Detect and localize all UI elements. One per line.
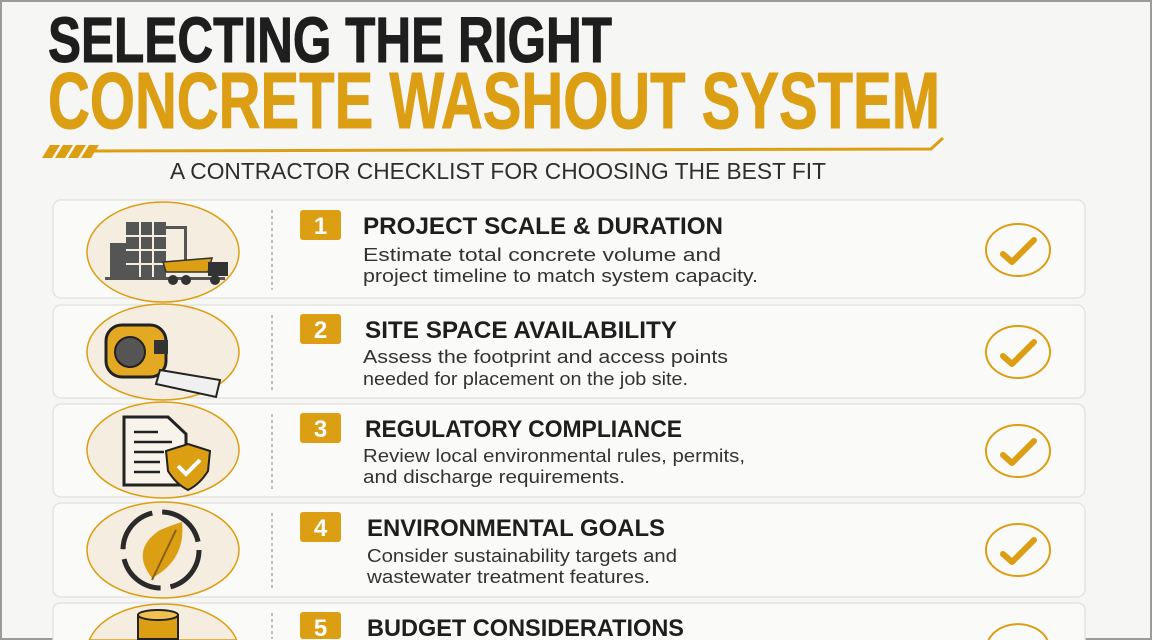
icon: checkmark — [986, 224, 1050, 276]
description: Consider sustainability targets and — [367, 546, 677, 566]
description — [363, 245, 758, 286]
description — [363, 347, 728, 389]
row 2: site space — [53, 304, 1085, 400]
number badge 4 — [300, 512, 341, 542]
number badge 3: 3 — [314, 416, 327, 443]
title — [48, 4, 940, 145]
title: SELECTING THE RIGHT — [48, 4, 612, 76]
description — [363, 446, 745, 487]
icon: coins — [89, 604, 237, 640]
row 4: environmental — [53, 502, 1085, 598]
row 3: regulatory — [53, 402, 1085, 498]
icon: checkmark — [988, 624, 1048, 640]
row 5: budget — [53, 603, 1085, 640]
icon: checkmark — [986, 425, 1050, 477]
underline accent — [42, 138, 943, 158]
number badge 3 — [300, 413, 341, 443]
heading: SITE SPACE AVAILABILITY — [365, 317, 677, 344]
heading: REGULATORY COMPLIANCE — [365, 416, 682, 443]
number badge 4: 4 — [314, 515, 328, 542]
number badge 2: 2 — [314, 317, 327, 344]
description: wastewater treatment features. — [366, 567, 650, 587]
row 1: project scale — [53, 200, 1085, 302]
number badge 2 — [300, 314, 341, 344]
description: Assess the footprint and access points — [363, 347, 728, 367]
icon: checkmark — [986, 326, 1050, 378]
description: Review local environmental rules, permits, — [363, 446, 745, 466]
heading: ENVIRONMENTAL GOALS — [367, 515, 665, 542]
subtitle: A CONTRACTOR CHECKLIST FOR CHOOSING THE BEST FIT — [170, 158, 826, 184]
description: project timeline to match system capacity. — [363, 266, 758, 286]
icon: checkmark — [986, 524, 1050, 576]
description — [366, 546, 677, 587]
icon: leaf recycle — [87, 502, 239, 598]
icon: tape measure — [87, 304, 239, 400]
description: Estimate total concrete volume and — [363, 245, 721, 265]
heading: PROJECT SCALE & DURATION — [363, 213, 723, 240]
description: and discharge requirements. — [363, 467, 625, 487]
number badge 1 — [300, 210, 341, 240]
number badge 1: 1 — [314, 213, 327, 240]
description: needed for placement on the job site. — [363, 369, 688, 389]
icon: document shield — [87, 402, 239, 498]
number badge 5 — [300, 612, 341, 640]
icon: building and truck — [87, 202, 239, 302]
